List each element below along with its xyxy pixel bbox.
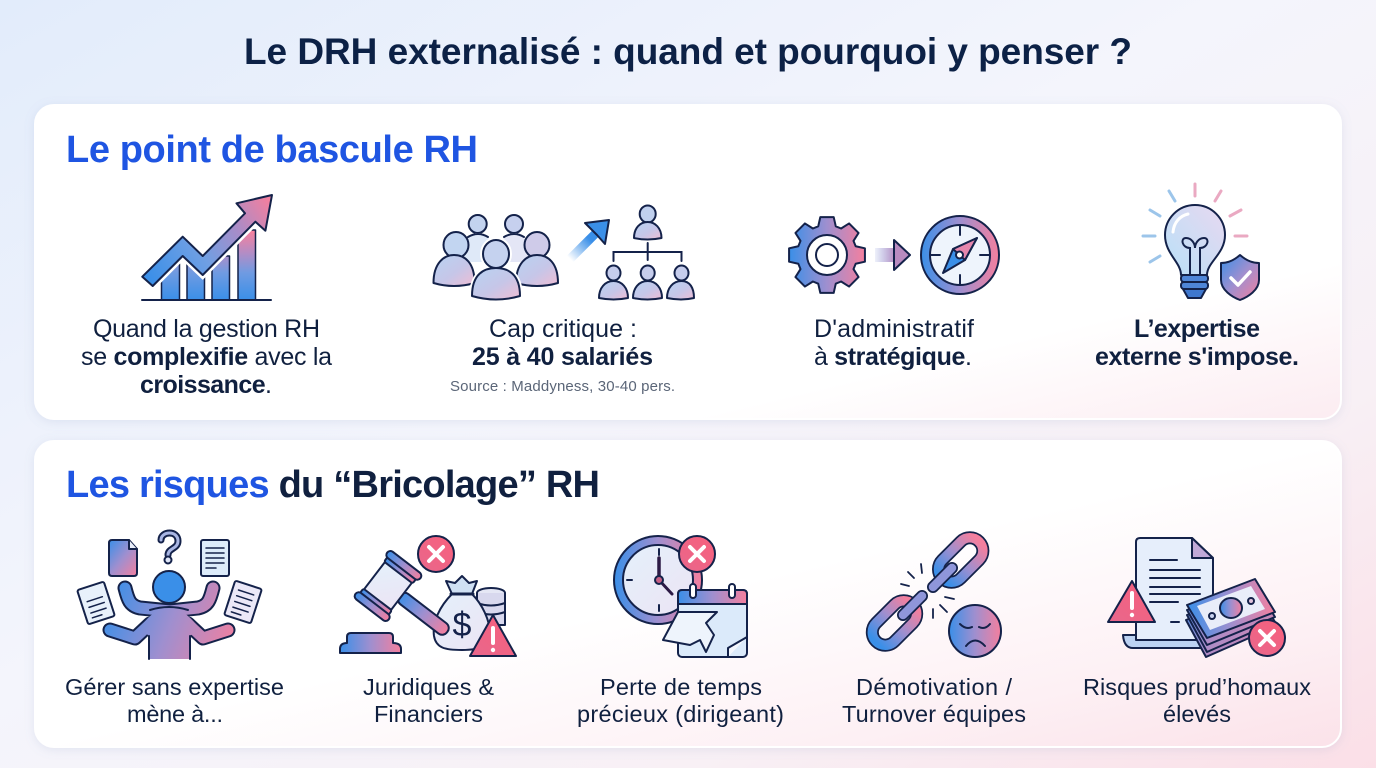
text: précieux: précieux (dirigeant)	[577, 701, 784, 727]
icon: overwhelmed manager	[77, 533, 262, 659]
text: risques prud'homaux: Risques prud’homaux	[1083, 674, 1311, 700]
icon: legal document, warning and money	[1108, 538, 1285, 657]
icon: broken chain and sad face	[867, 532, 1001, 657]
text: cap critique: Cap critique :	[489, 315, 637, 343]
panel: les risques du bricolage RH	[35, 441, 1341, 747]
icon: clock and torn calendar	[614, 536, 747, 657]
text: l'expertise: L’expertise	[1134, 315, 1260, 343]
text: élevés: élevés	[1163, 701, 1231, 727]
panel: le point de bascule RH	[35, 105, 1341, 419]
heading: les risques: Les risques du “Bricolage” RH	[66, 464, 600, 506]
text: démotivation: Démotivation /	[856, 674, 1012, 700]
text: juridiques: Juridiques &	[363, 674, 494, 700]
text: source: Source : Maddyness, 30-40 pers.	[450, 378, 675, 395]
icon: team to organisation chart	[434, 206, 694, 301]
icon: growth chart	[142, 195, 272, 300]
text: à stratégique: à stratégique.	[814, 343, 972, 371]
text: 25 à 40 salariés: 25 à 40 salariés	[472, 343, 653, 371]
icon: light bulb with shield	[1143, 184, 1259, 300]
text: d'administratif: D'administratif	[814, 315, 974, 343]
text: turnover: Turnover équipes	[842, 701, 1026, 727]
icon: gear to compass	[789, 216, 999, 294]
text: perte de temps: Perte de temps	[600, 674, 762, 700]
title: Le DRH externalisé : quand et pourquoi y penser ?	[244, 31, 1132, 72]
icon: gavel, money bag and warning: $	[453, 606, 472, 644]
heading: le point de bascule: Le point de bascule RH	[66, 129, 478, 171]
text: financiers: Financiers	[374, 701, 483, 727]
icon: gavel, money bag and warning	[340, 536, 516, 656]
text: gérer sans expertise: Gérer sans expertise	[65, 674, 284, 700]
text: croissance: croissance.	[140, 371, 272, 399]
text: mène à: mène à...	[127, 701, 223, 727]
text: complexifie: se complexifie avec la	[81, 343, 332, 371]
text: externe s'impose: externe s'impose.	[1095, 343, 1299, 371]
text: gestion RH: Quand la gestion RH	[93, 315, 320, 343]
